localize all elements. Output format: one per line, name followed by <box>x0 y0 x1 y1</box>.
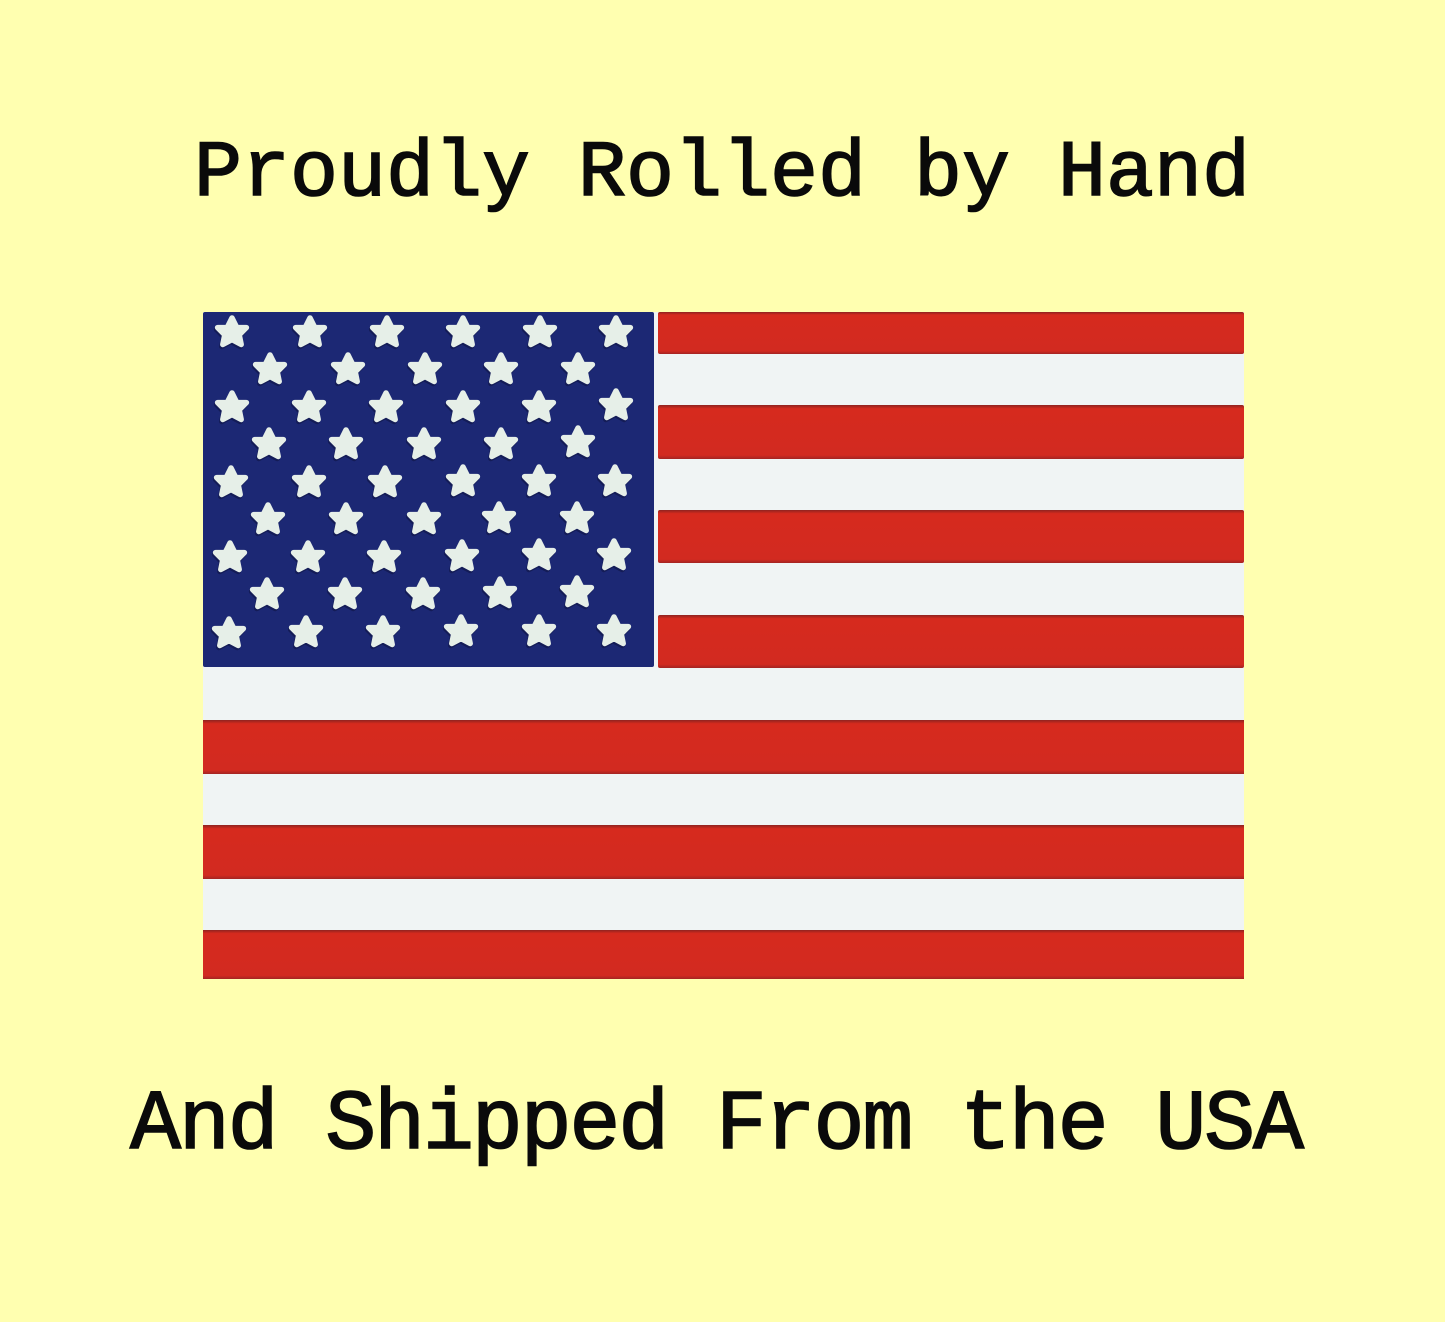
blue canton <box>203 312 654 667</box>
heading: bottom line: And Shipped From the USA <box>130 1077 1304 1174</box>
flag white field <box>203 312 1244 979</box>
heading: top line: Proudly Rolled by Hand <box>194 129 1250 220</box>
flag <box>203 312 1244 979</box>
short red stripes <box>658 312 1244 668</box>
long red stripes <box>203 720 1244 979</box>
stars <box>214 318 630 648</box>
